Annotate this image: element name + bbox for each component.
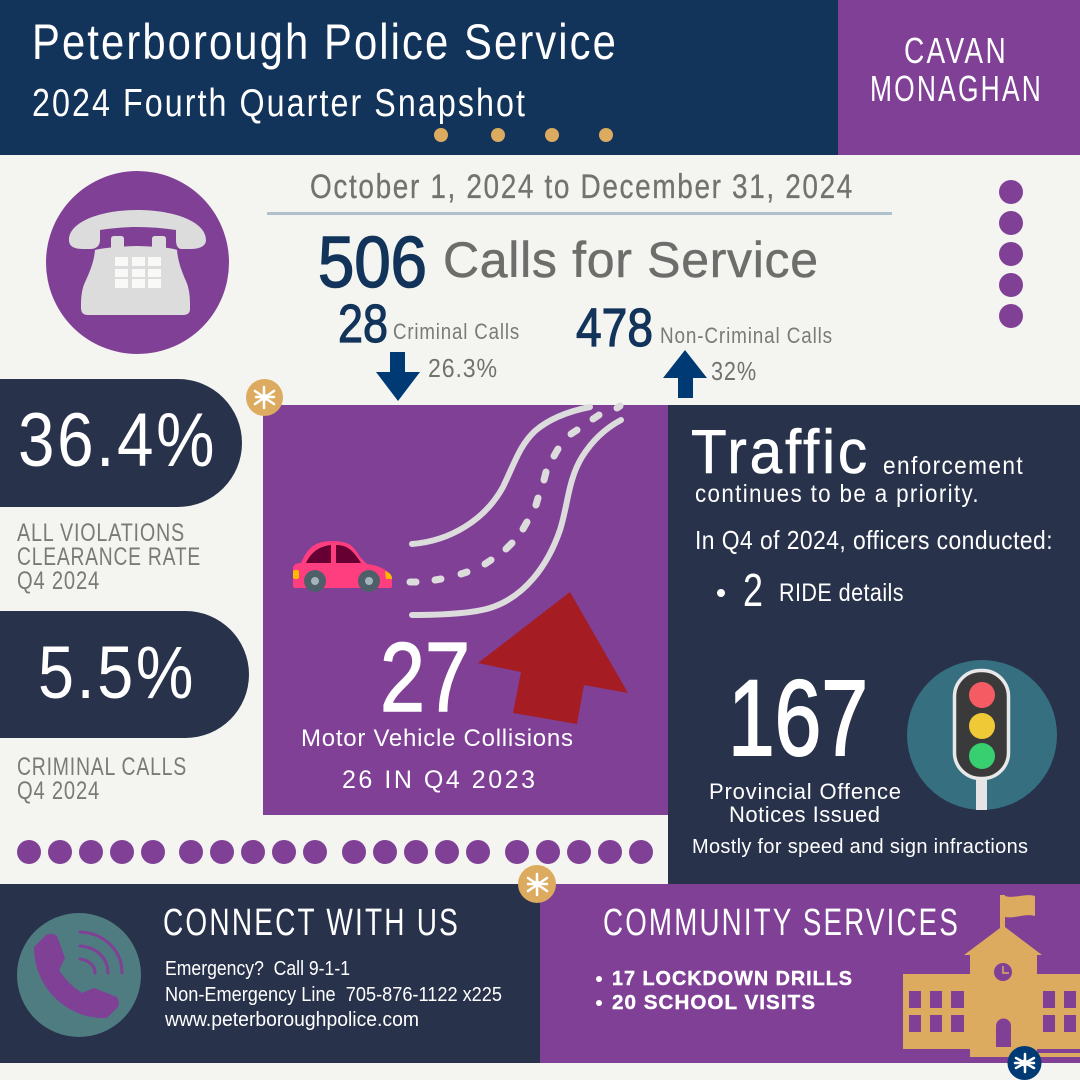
badge: navy star <box>1008 1046 1042 1080</box>
total calls for service <box>318 223 818 303</box>
dot row <box>17 840 653 864</box>
icon: school building <box>903 895 1080 1057</box>
badge: gold star top <box>246 379 283 416</box>
panel: connect with us <box>0 884 540 1063</box>
panel: community services <box>540 884 1080 1063</box>
offence notices label: Provincial Offence <box>709 779 901 804</box>
road illustration <box>410 406 621 615</box>
panel: clearance rate: CLEARANCE RATE <box>17 543 201 571</box>
collisions label: Motor Vehicle Collisions <box>301 725 573 752</box>
vertical dots <box>999 180 1023 328</box>
offence notices label: Notices Issued <box>729 802 880 827</box>
panel: criminal calls rate <box>0 611 249 805</box>
title: Peterborough Police Service <box>32 14 618 70</box>
non-criminal calls stat <box>576 298 833 398</box>
criminal calls stat <box>338 294 520 401</box>
collisions figure: 27 <box>380 622 470 732</box>
date range: October 1, 2024 to December 31, 2024 <box>310 168 854 206</box>
panel: clearance rate: 36.4% <box>18 398 217 483</box>
RIDE details <box>717 564 904 616</box>
contact details <box>164 958 502 1031</box>
criminal calls stat: 26.3% <box>428 353 498 383</box>
icon: car <box>293 541 392 592</box>
contact details: Non-Emergency Line 705-876-1122 x225 <box>165 984 502 1006</box>
connect heading: CONNECT WITH US <box>163 902 460 944</box>
RIDE details: 2 <box>743 564 763 616</box>
RIDE details: RIDE details <box>779 579 904 607</box>
badge: gold star bottom <box>518 865 556 903</box>
arrow: criminal calls down <box>376 352 420 401</box>
panel: clearance rate: Q4 2024 <box>17 567 100 595</box>
prior year comparison: 26 IN Q4 2023 <box>342 766 535 794</box>
panel: clearance rate: ALL VIOLATIONS <box>17 519 185 547</box>
panel: municipality name: CAVAN <box>904 30 1008 71</box>
contact details: Emergency? Call 9-1-1 <box>165 958 350 980</box>
header banner <box>0 0 838 155</box>
panel: municipality name <box>838 0 1080 155</box>
offence notices label <box>709 779 901 827</box>
community list: 20 SCHOOL VISITS <box>612 992 816 1014</box>
total calls for service: 506 <box>318 223 427 303</box>
panel: traffic enforcement <box>668 405 1080 884</box>
subtitle: 2024 Fourth Quarter Snapshot <box>32 82 527 125</box>
community list: 17 LOCKDOWN DRILLS <box>612 968 853 990</box>
header dots <box>434 128 613 142</box>
traffic heading: Traffic <box>691 418 870 487</box>
criminal calls stat: 28 <box>338 294 388 354</box>
panel: traffic enforcement: continues to be a priority. <box>695 480 980 508</box>
arrow: non-criminal calls up <box>663 350 707 398</box>
contact details: www.peterboroughpolice.com <box>164 1009 419 1031</box>
community heading: COMMUNITY SERVICES <box>603 902 960 944</box>
icon: traffic light <box>907 660 1057 810</box>
panel: criminal calls rate: Q4 2024 <box>17 777 100 805</box>
non-criminal calls stat: 478 <box>576 298 653 358</box>
arrow: collisions up <box>478 592 628 724</box>
icon: phone handset <box>17 913 141 1037</box>
offence notices figure: 167 <box>728 657 868 778</box>
panel: criminal calls rate: CRIMINAL CALLS <box>17 753 187 781</box>
non-criminal calls stat: 32% <box>711 356 757 386</box>
panel: clearance rate <box>0 379 242 595</box>
panel: traffic enforcement: enforcement <box>883 452 1024 480</box>
panel: criminal calls rate: 5.5% <box>38 631 196 714</box>
offence note: Mostly for speed and sign infractions <box>692 836 1028 858</box>
criminal calls stat: Criminal Calls <box>393 319 520 344</box>
community list <box>596 968 853 1014</box>
non-criminal calls stat: Non-Criminal Calls <box>660 323 833 348</box>
total calls for service: Calls for Service <box>443 232 818 288</box>
panel: motor vehicle collisions <box>263 405 668 815</box>
icon: telephone <box>46 171 229 354</box>
